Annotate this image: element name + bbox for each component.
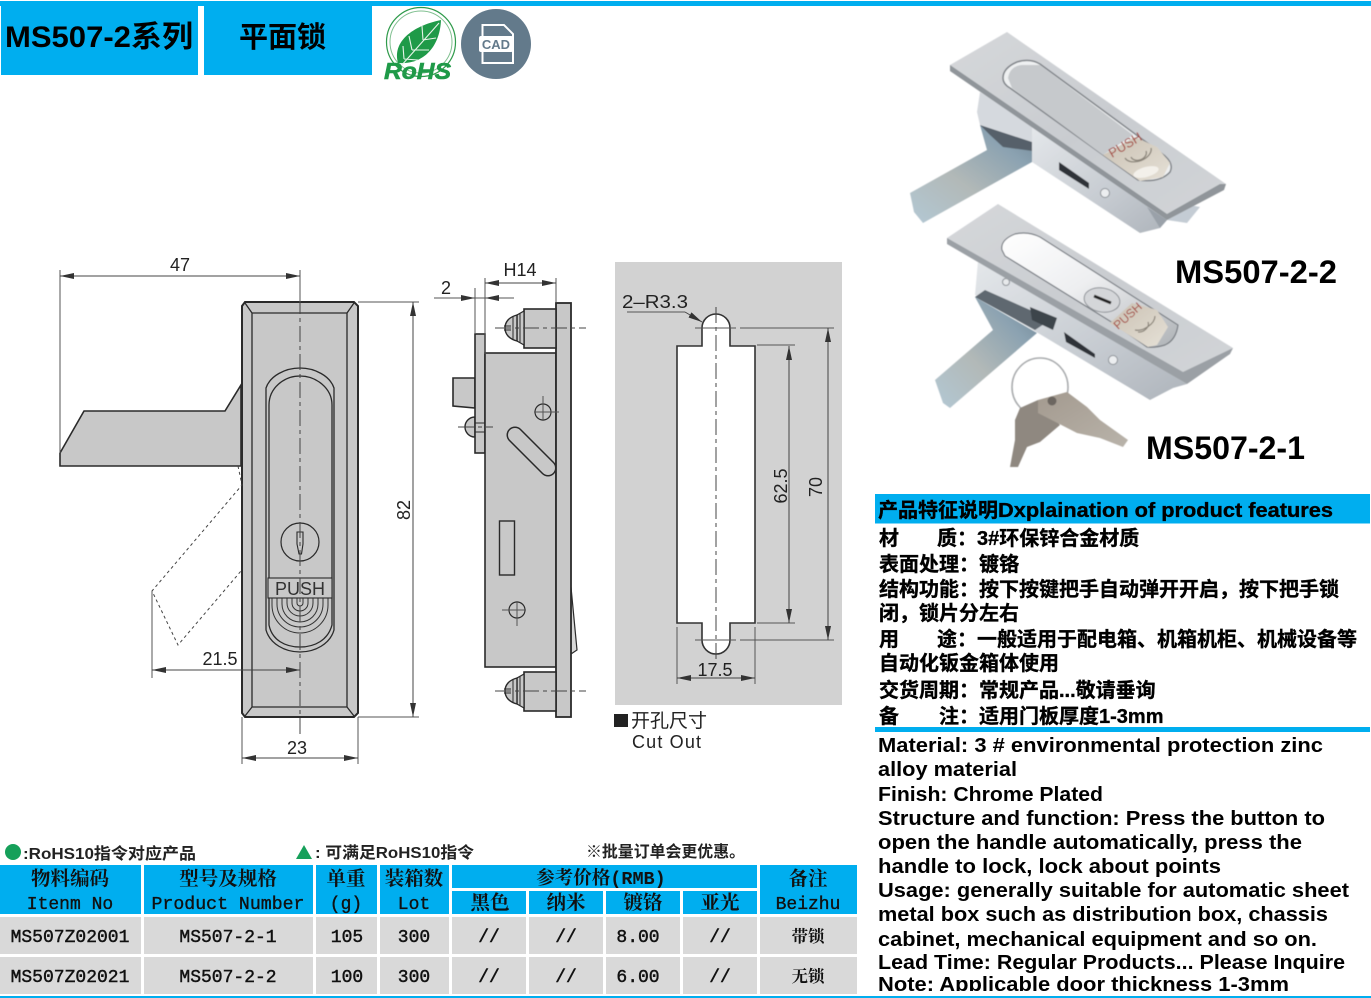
table row 2: MS507-2-2	[179, 968, 277, 988]
dimension 17.5	[677, 627, 755, 684]
icon: RoHS badge	[372, 6, 532, 84]
text block: English features: Finish: Chrome Plated	[878, 784, 1103, 806]
cut out shape	[677, 314, 755, 654]
text block: Chinese features: 途：一般适用于配电箱、机箱机柜、机械设备等	[937, 627, 1357, 651]
bottom blue rule	[0, 996, 1371, 998]
dimension H14	[485, 260, 556, 354]
knob	[465, 417, 475, 437]
panel: features heading	[875, 494, 1370, 524]
centre line	[715, 307, 717, 662]
handle	[910, 125, 1040, 223]
legend: bulk order note: ※批量订单会更优惠。	[586, 842, 745, 861]
dimension 82: 82	[394, 500, 414, 520]
dimension 2	[434, 278, 514, 334]
push badge: PUSH	[1106, 129, 1145, 161]
icon: RoHS badge: RoHS	[384, 58, 452, 84]
centre line	[299, 270, 301, 735]
caption: cut out	[614, 710, 707, 752]
caption: cut out: Cut Out	[632, 732, 701, 752]
key cylinder	[1082, 285, 1122, 315]
table row 2: //	[709, 968, 731, 988]
button slot	[266, 368, 334, 652]
text block: Chinese features: 结构功能：按下按键把手自动弹开开启，按下把手锁	[879, 578, 1339, 601]
table header labels: 装箱数	[385, 868, 444, 891]
push label: PUSH	[275, 579, 325, 599]
text block: English features: Structure and function: Press the button to	[878, 808, 1325, 830]
dimension 62.5	[757, 345, 795, 623]
label: MS507-2-1: MS507-2-1	[1146, 430, 1305, 466]
table row 2: 300	[398, 968, 430, 988]
latch tab	[453, 378, 475, 408]
label: MS507-2-2: MS507-2-2	[1175, 254, 1337, 290]
button	[1008, 65, 1133, 155]
icon: CAD file: CAD	[482, 37, 510, 52]
text block: Chinese features	[879, 526, 1357, 728]
table header labels: Beizhu	[776, 895, 840, 915]
dimension 82	[358, 302, 419, 717]
dimension 23	[242, 717, 358, 764]
text block: English features: Usage: generally suitable for automatic sheet	[878, 880, 1349, 902]
housing side	[1032, 127, 1167, 233]
dimension 70	[695, 328, 834, 640]
text block: Chinese features: 交货周期：常规产品...敬请垂询	[879, 678, 1156, 702]
table header labels: 黑色	[470, 892, 510, 915]
table header labels: 参考价格(RMB)	[536, 868, 666, 890]
text block: Chinese features: 自动化钣金箱体使用	[879, 651, 1059, 675]
slot	[1003, 60, 1171, 181]
dimension 23: 23	[287, 738, 307, 758]
table row 2: 6.00	[616, 968, 660, 988]
plate	[950, 32, 1226, 220]
text block: English features: alloy material	[878, 759, 1017, 781]
plate	[947, 204, 1233, 377]
text block: Chinese features: 质：3#环保锌合金材质	[937, 526, 1139, 550]
table row 1: MS507Z02001	[11, 928, 129, 948]
dimension 21.5: 21.5	[202, 649, 238, 669]
table row 2: MS507Z02021	[11, 968, 129, 988]
photo: lock MS507-2-1 with cylinder	[935, 204, 1233, 408]
table row 2: 无锁	[792, 966, 826, 987]
dimension H14: H14	[503, 260, 537, 280]
dimension 62.5: 62.5	[771, 468, 791, 504]
push ridges	[272, 598, 328, 633]
table row 1: 带锁	[790, 926, 826, 947]
text block: English features	[870, 735, 1371, 996]
table row 1: 300	[398, 928, 430, 948]
technical drawing: front view	[60, 255, 419, 764]
text block: English features: cabinet, mechanical equipment and so on.	[878, 929, 1317, 951]
table row 1: //	[709, 928, 731, 948]
divider bar	[875, 727, 1370, 732]
table header labels	[27, 868, 840, 915]
handle	[60, 385, 241, 466]
table row 1: MS507-2-1	[179, 928, 277, 948]
photo: lock MS507-2-2 without key	[910, 32, 1226, 233]
slot	[1002, 233, 1178, 347]
table row 1	[11, 926, 826, 948]
housing upper	[977, 92, 1036, 142]
table header labels: 亚光	[700, 892, 740, 915]
push badge	[1103, 129, 1170, 181]
legend: RoHS10 compliant: :RoHS10指令对应产品	[23, 844, 196, 863]
plate edge	[556, 303, 571, 717]
text block: English features: Material: 3 # environmental protection zinc	[878, 735, 1323, 757]
text block: English features: handle to lock, lock about points	[878, 856, 1221, 878]
lower hole	[502, 601, 526, 626]
heading: series name: MS507-2系列	[5, 21, 193, 54]
centre lines	[458, 328, 586, 691]
dark wedge	[980, 125, 1053, 152]
table row 2	[11, 966, 826, 988]
text block: Chinese features: 用	[879, 629, 899, 651]
icon: CAD file	[461, 9, 531, 79]
table header labels: (g)	[330, 895, 362, 915]
text block: Chinese features: 表面处理：镀铬	[879, 552, 1019, 576]
handle	[935, 297, 1037, 408]
dimension 70: 70	[806, 477, 826, 497]
legend: meets RoHS10: : 可满足RoHS10指令	[315, 843, 474, 862]
table: product prices	[0, 865, 857, 994]
table row 1: 8.00	[616, 928, 660, 948]
heading: series name	[1, 1, 198, 75]
table header labels: 镀铬	[623, 892, 663, 915]
text block: Chinese features: 备	[879, 705, 899, 728]
push badge: PUSH	[1111, 300, 1145, 332]
dimension 47: 47	[170, 255, 190, 275]
technical drawing: side view	[434, 260, 586, 717]
radius callout	[622, 292, 702, 322]
handle bump	[571, 587, 577, 654]
top blue rule	[0, 1, 1371, 6]
table row backgrounds	[0, 917, 857, 994]
upper screw	[504, 309, 556, 348]
lock plate	[242, 302, 358, 717]
text block: Chinese features: 材	[879, 527, 899, 550]
table header labels: Product Number	[152, 895, 304, 915]
text block: English features: open the handle automatically, press the	[878, 832, 1302, 854]
open handle ghost	[152, 466, 242, 645]
text block: Chinese features: 闭，锁片分左右	[879, 602, 1019, 625]
dimension 47	[60, 255, 300, 453]
housing	[485, 353, 556, 667]
front flange	[475, 334, 485, 453]
panel: cut out drawing	[615, 262, 842, 705]
table header labels: 型号及规格	[179, 868, 277, 891]
table row 2: //	[555, 968, 577, 988]
table header labels: 单重	[326, 868, 366, 891]
push badge	[1110, 300, 1168, 347]
panel: features heading: Dxplaination of product features	[998, 500, 1333, 522]
table header labels: Lot	[398, 895, 430, 915]
knob pin	[475, 423, 485, 432]
text block: English features: Lead Time: Regular Products... Please Inquire	[878, 952, 1345, 974]
key cylinder	[281, 523, 319, 561]
housing	[975, 261, 1187, 400]
photo: keys on ring	[1010, 358, 1128, 467]
heading: product type	[204, 1, 372, 75]
table row 1: //	[555, 928, 577, 948]
table header labels: 备注	[788, 868, 828, 891]
table header labels: 物料编码	[31, 868, 109, 891]
caption: cut out: 开孔尺寸	[631, 710, 707, 732]
table header labels: 纳米	[546, 892, 586, 915]
panel: features heading: 产品特征说明	[878, 500, 998, 522]
text block: Chinese features: 注：适用门板厚度1-3mm	[939, 705, 1163, 728]
text block: English features: metal box such as distribution box, chassis	[878, 904, 1328, 926]
table row 2: 100	[331, 968, 363, 988]
table row 1: 105	[331, 928, 363, 948]
lower screw	[504, 672, 556, 711]
heading: product type: 平面锁	[239, 21, 326, 54]
dimension 2: 2	[441, 278, 451, 298]
table row 1: //	[478, 928, 500, 948]
table header	[0, 865, 857, 914]
rectangular window	[500, 521, 514, 575]
dimension 17.5: 17.5	[697, 660, 733, 680]
upper hole	[534, 396, 559, 421]
text block: English features: Note: Applicable door thickness 1-3mm	[878, 974, 1289, 996]
table header labels: Itenm No	[27, 895, 113, 915]
table row 2: //	[478, 968, 500, 988]
diagonal slot	[515, 435, 548, 468]
radius callout: 2–R3.3	[622, 292, 688, 312]
